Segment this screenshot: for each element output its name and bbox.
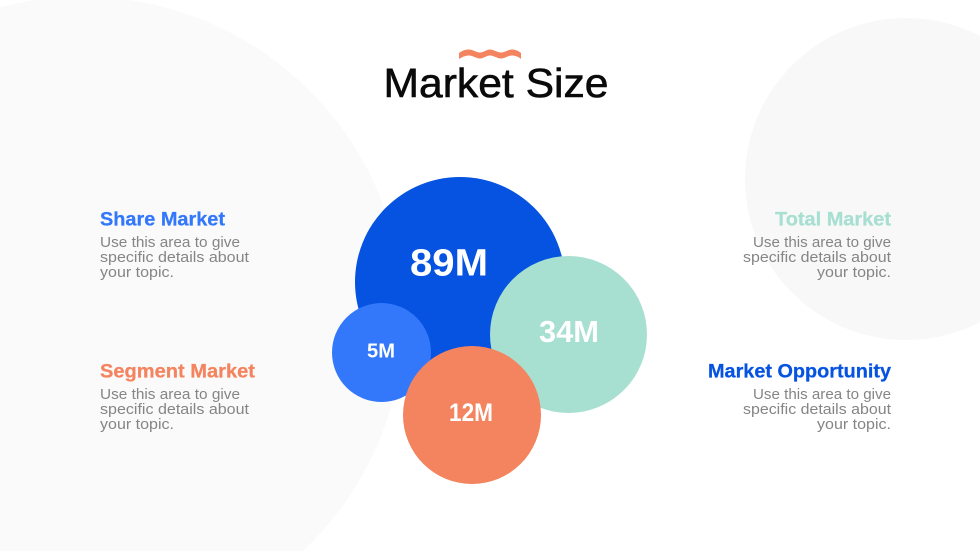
heading: segment market: Segment Market [100, 360, 256, 382]
description: segment market: Use this area to give [100, 386, 240, 403]
description: total market: your topic. [817, 264, 891, 281]
bubble: 89M: 89M [410, 242, 488, 284]
heading: total market: Total Market [775, 208, 892, 230]
heading: share market: Share Market [100, 208, 226, 230]
description: market opportunity: your topic. [817, 416, 891, 433]
title: Market Size [384, 60, 608, 106]
background circle: left [0, 0, 404, 551]
description: share market: Use this area to give [100, 234, 240, 251]
text block: share market [100, 208, 250, 281]
description: segment market [100, 386, 250, 433]
text block: total market [743, 208, 892, 281]
description: total market: specific details about [743, 249, 892, 266]
bubble: 89M [355, 177, 565, 387]
description: share market: your topic. [100, 264, 174, 281]
text block: segment market [100, 360, 256, 433]
bubble: 34M [490, 256, 647, 413]
bubble: 12M: 12M [449, 399, 493, 427]
description: share market: specific details about [100, 249, 250, 266]
description: segment market: specific details about [100, 401, 250, 418]
icon: orange wave [459, 50, 521, 59]
description: total market: Use this area to give [753, 234, 891, 251]
description: share market [100, 234, 250, 281]
bubble: 5M: 5M [367, 340, 395, 362]
bubble: 5M [332, 303, 431, 402]
background circle: right [745, 18, 980, 340]
title block [384, 50, 608, 106]
bubble: 12M [403, 346, 541, 484]
text block: market opportunity [708, 360, 892, 433]
heading: market opportunity: Market Opportunity [708, 360, 891, 382]
description: market opportunity: specific details about [743, 401, 892, 418]
bubble chart [332, 177, 647, 484]
description: market opportunity: Use this area to give [753, 386, 891, 403]
description: total market [743, 234, 892, 281]
description: market opportunity [743, 386, 892, 433]
bubble: 34M: 34M [539, 315, 599, 349]
description: segment market: your topic. [100, 416, 174, 433]
